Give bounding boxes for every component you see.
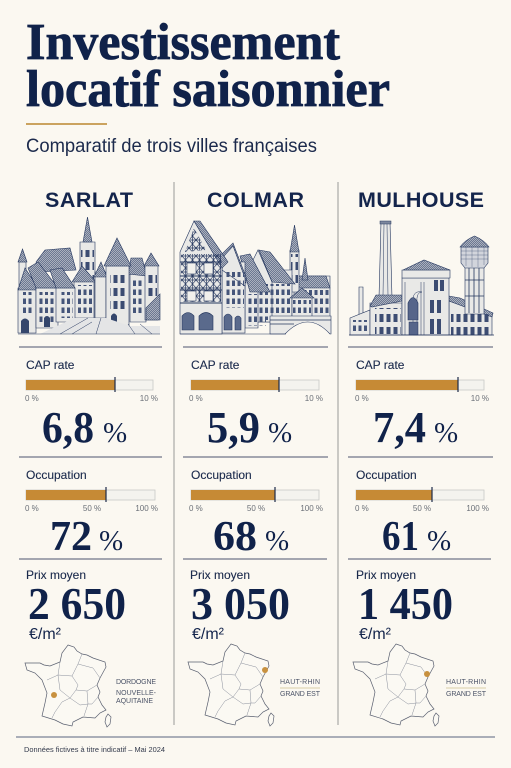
CAP rate metric: CAP rate [191, 358, 240, 372]
map: Dordogne [25, 645, 111, 727]
illustration: Colmar half-timbered houses [180, 221, 331, 334]
Occupation metric: % [99, 525, 123, 557]
price metric: €/m² [359, 626, 392, 643]
map: Haut-Rhin [353, 644, 439, 726]
CAP rate metric: % [268, 417, 292, 449]
rule [183, 558, 327, 560]
Occupation metric: Occupation [26, 468, 87, 482]
region label [116, 679, 157, 705]
illustration: Mulhouse industrial site [349, 221, 494, 335]
Occupation metric: % [427, 525, 451, 557]
region label: NOUVELLE- [116, 690, 157, 697]
rule [19, 346, 162, 348]
Occupation metric: 0 % [355, 504, 369, 513]
CAP rate metric: 10 % [305, 394, 323, 403]
subtitle: Comparatif de trois villes françaises [26, 136, 317, 157]
heading: Mulhouse: MULHOUSE [358, 188, 484, 212]
Occupation metric: 100 % [135, 504, 158, 513]
Occupation metric: % [265, 525, 289, 557]
CAP rate metric: 0 % [189, 394, 203, 403]
illustration: Sarlat medieval town [18, 217, 160, 334]
region label: AQUITAINE [116, 698, 153, 705]
price metric: 3 050 [191, 579, 290, 629]
price metric: 2 650 [28, 579, 126, 629]
CAP rate metric: 0 % [355, 394, 369, 403]
Occupation metric: 50 % [247, 504, 265, 513]
region label: HAUT-RHIN [280, 679, 320, 686]
heading: Colmar: COLMAR [207, 188, 304, 212]
rule [348, 346, 493, 348]
title: locatif saisonnier [26, 61, 390, 118]
price metric: 1 450 [358, 579, 453, 629]
region label: HAUT-RHIN [446, 679, 486, 686]
CAP rate metric [189, 358, 323, 452]
Occupation metric [25, 468, 158, 560]
Occupation metric: 0 % [189, 504, 203, 513]
Occupation metric [355, 468, 489, 560]
Occupation metric: 100 % [300, 504, 323, 513]
panel: Mulhouse [348, 188, 494, 726]
region label: GRAND EST [446, 691, 487, 698]
region label: GRAND EST [280, 691, 321, 698]
CAP rate metric: CAP rate [356, 358, 405, 372]
CAP rate metric: 10 % [471, 394, 489, 403]
price metric: Prix moyen [26, 568, 86, 582]
title [26, 14, 390, 118]
footer note: Données fictives à titre indicatif – Mai 2024 [24, 745, 165, 754]
CAP rate metric: 6,8 [42, 403, 94, 452]
CAP rate metric: % [434, 417, 458, 449]
price metric: €/m² [192, 626, 225, 643]
rule [183, 456, 328, 458]
CAP rate metric: 10 % [140, 394, 158, 403]
Occupation metric [189, 468, 323, 560]
rule [19, 558, 162, 560]
title: Investissement [26, 14, 341, 71]
CAP rate metric [25, 358, 158, 452]
Occupation metric: 50 % [413, 504, 431, 513]
rule [19, 456, 162, 458]
Occupation metric: 68 [213, 514, 257, 560]
panel: Colmar [180, 188, 331, 726]
rule [183, 346, 328, 348]
price metric: Prix moyen [190, 568, 250, 582]
CAP rate metric: 5,9 [207, 403, 260, 452]
rule [348, 558, 491, 560]
panel: Sarlat [18, 188, 162, 727]
CAP rate metric [355, 358, 489, 452]
accent rule [26, 123, 107, 125]
price metric [356, 568, 453, 643]
Occupation metric: 50 % [83, 504, 101, 513]
price metric [26, 568, 126, 643]
region label [280, 679, 321, 698]
Occupation metric: 100 % [466, 504, 489, 513]
region label: DORDOGNE [116, 679, 156, 686]
Occupation metric: 72 [50, 514, 92, 560]
rule [348, 456, 493, 458]
Occupation metric: Occupation [191, 468, 252, 482]
map: Haut-Rhin [188, 644, 274, 726]
CAP rate metric: CAP rate [26, 358, 75, 372]
heading: Sarlat: SARLAT [45, 188, 133, 212]
price metric: Prix moyen [356, 568, 416, 582]
CAP rate metric: % [103, 417, 127, 449]
CAP rate metric: 7,4 [373, 403, 426, 452]
Occupation metric: 61 [382, 514, 419, 560]
region label [446, 679, 487, 698]
price metric: €/m² [29, 626, 62, 643]
Occupation metric: Occupation [356, 468, 417, 482]
price metric [190, 568, 290, 643]
CAP rate metric: 0 % [25, 394, 39, 403]
Occupation metric: 0 % [25, 504, 39, 513]
